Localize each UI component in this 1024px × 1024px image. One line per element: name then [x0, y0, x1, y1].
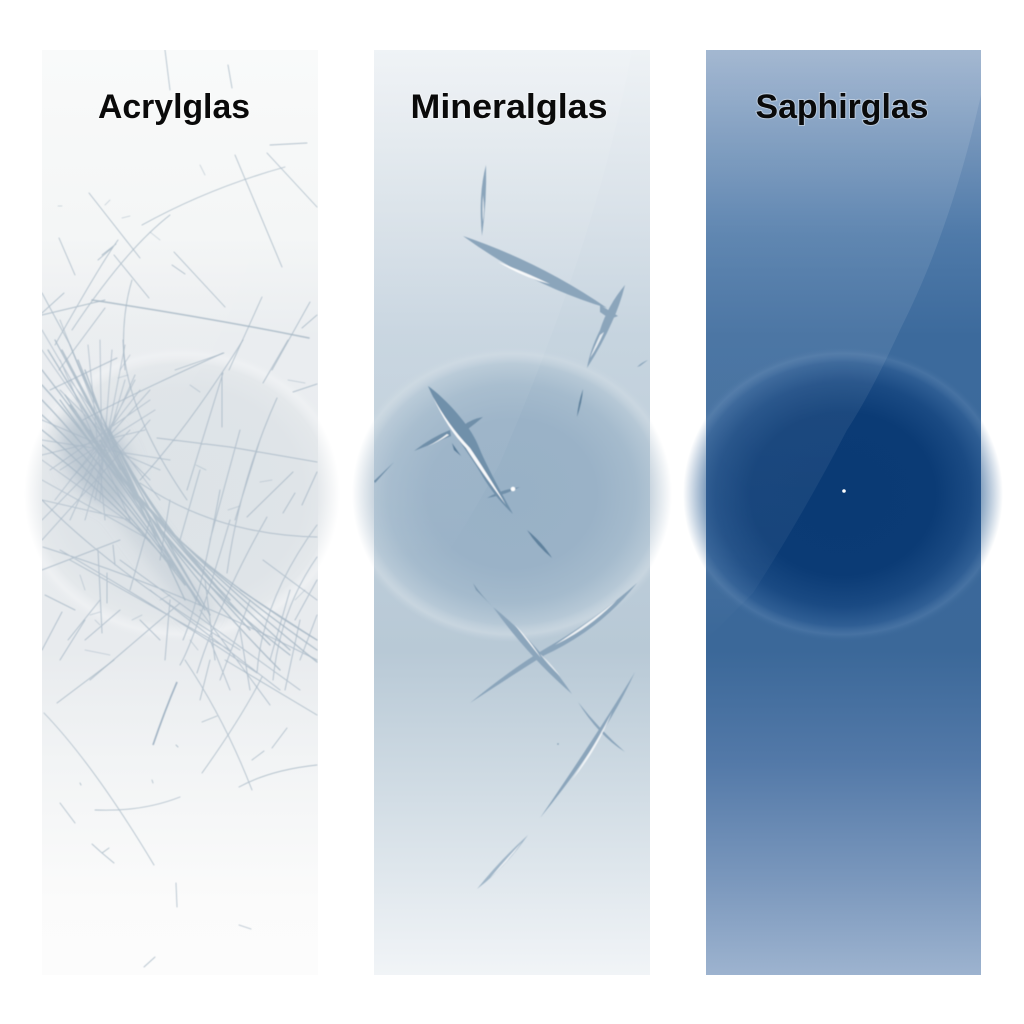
reflection: Acrylglas: [42, 50, 300, 440]
scratches, lower region: [44, 660, 317, 967]
gouge bodies: [374, 165, 648, 889]
panel background: Mineralglas: [374, 50, 650, 975]
outer glow: Saphirglas: [683, 344, 1003, 644]
panel: Saphirglas: [675, 50, 1011, 975]
reflection: Saphirglas: [706, 50, 981, 575]
scratch: short wide gouge: [153, 682, 177, 745]
small nicks: [58, 165, 305, 655]
main scratch sweep: [42, 340, 317, 670]
title: Acrylglas: Acrylglas: [98, 88, 250, 126]
title: Mineralglas: Mineralglas: [410, 88, 608, 126]
contact halo: Acrylglas: [50, 376, 312, 605]
scratches: dense fine scratches: [42, 50, 317, 967]
reflection: Mineralglas: [374, 50, 632, 565]
panel background: Acrylglas: [42, 50, 318, 975]
panel: Mineralglas: [344, 50, 680, 975]
contact halo: Saphirglas: [706, 352, 981, 636]
outer glow: Mineralglas: [352, 344, 672, 644]
outer glow: Acrylglas: [24, 344, 340, 644]
panel background: Saphirglas: [706, 50, 981, 975]
title: Saphirglas: Saphirglas: [756, 88, 928, 126]
long scratches, centre: [42, 340, 317, 705]
scratches, upper region: [42, 50, 317, 370]
contact point: [842, 489, 846, 493]
scratches: deep gouges: [374, 165, 648, 889]
contact halo: Mineralglas: [374, 361, 650, 637]
panel: Acrylglas: [31, 50, 334, 968]
scratch cluster shading: [46, 402, 200, 610]
gouge highlights: [428, 195, 617, 878]
